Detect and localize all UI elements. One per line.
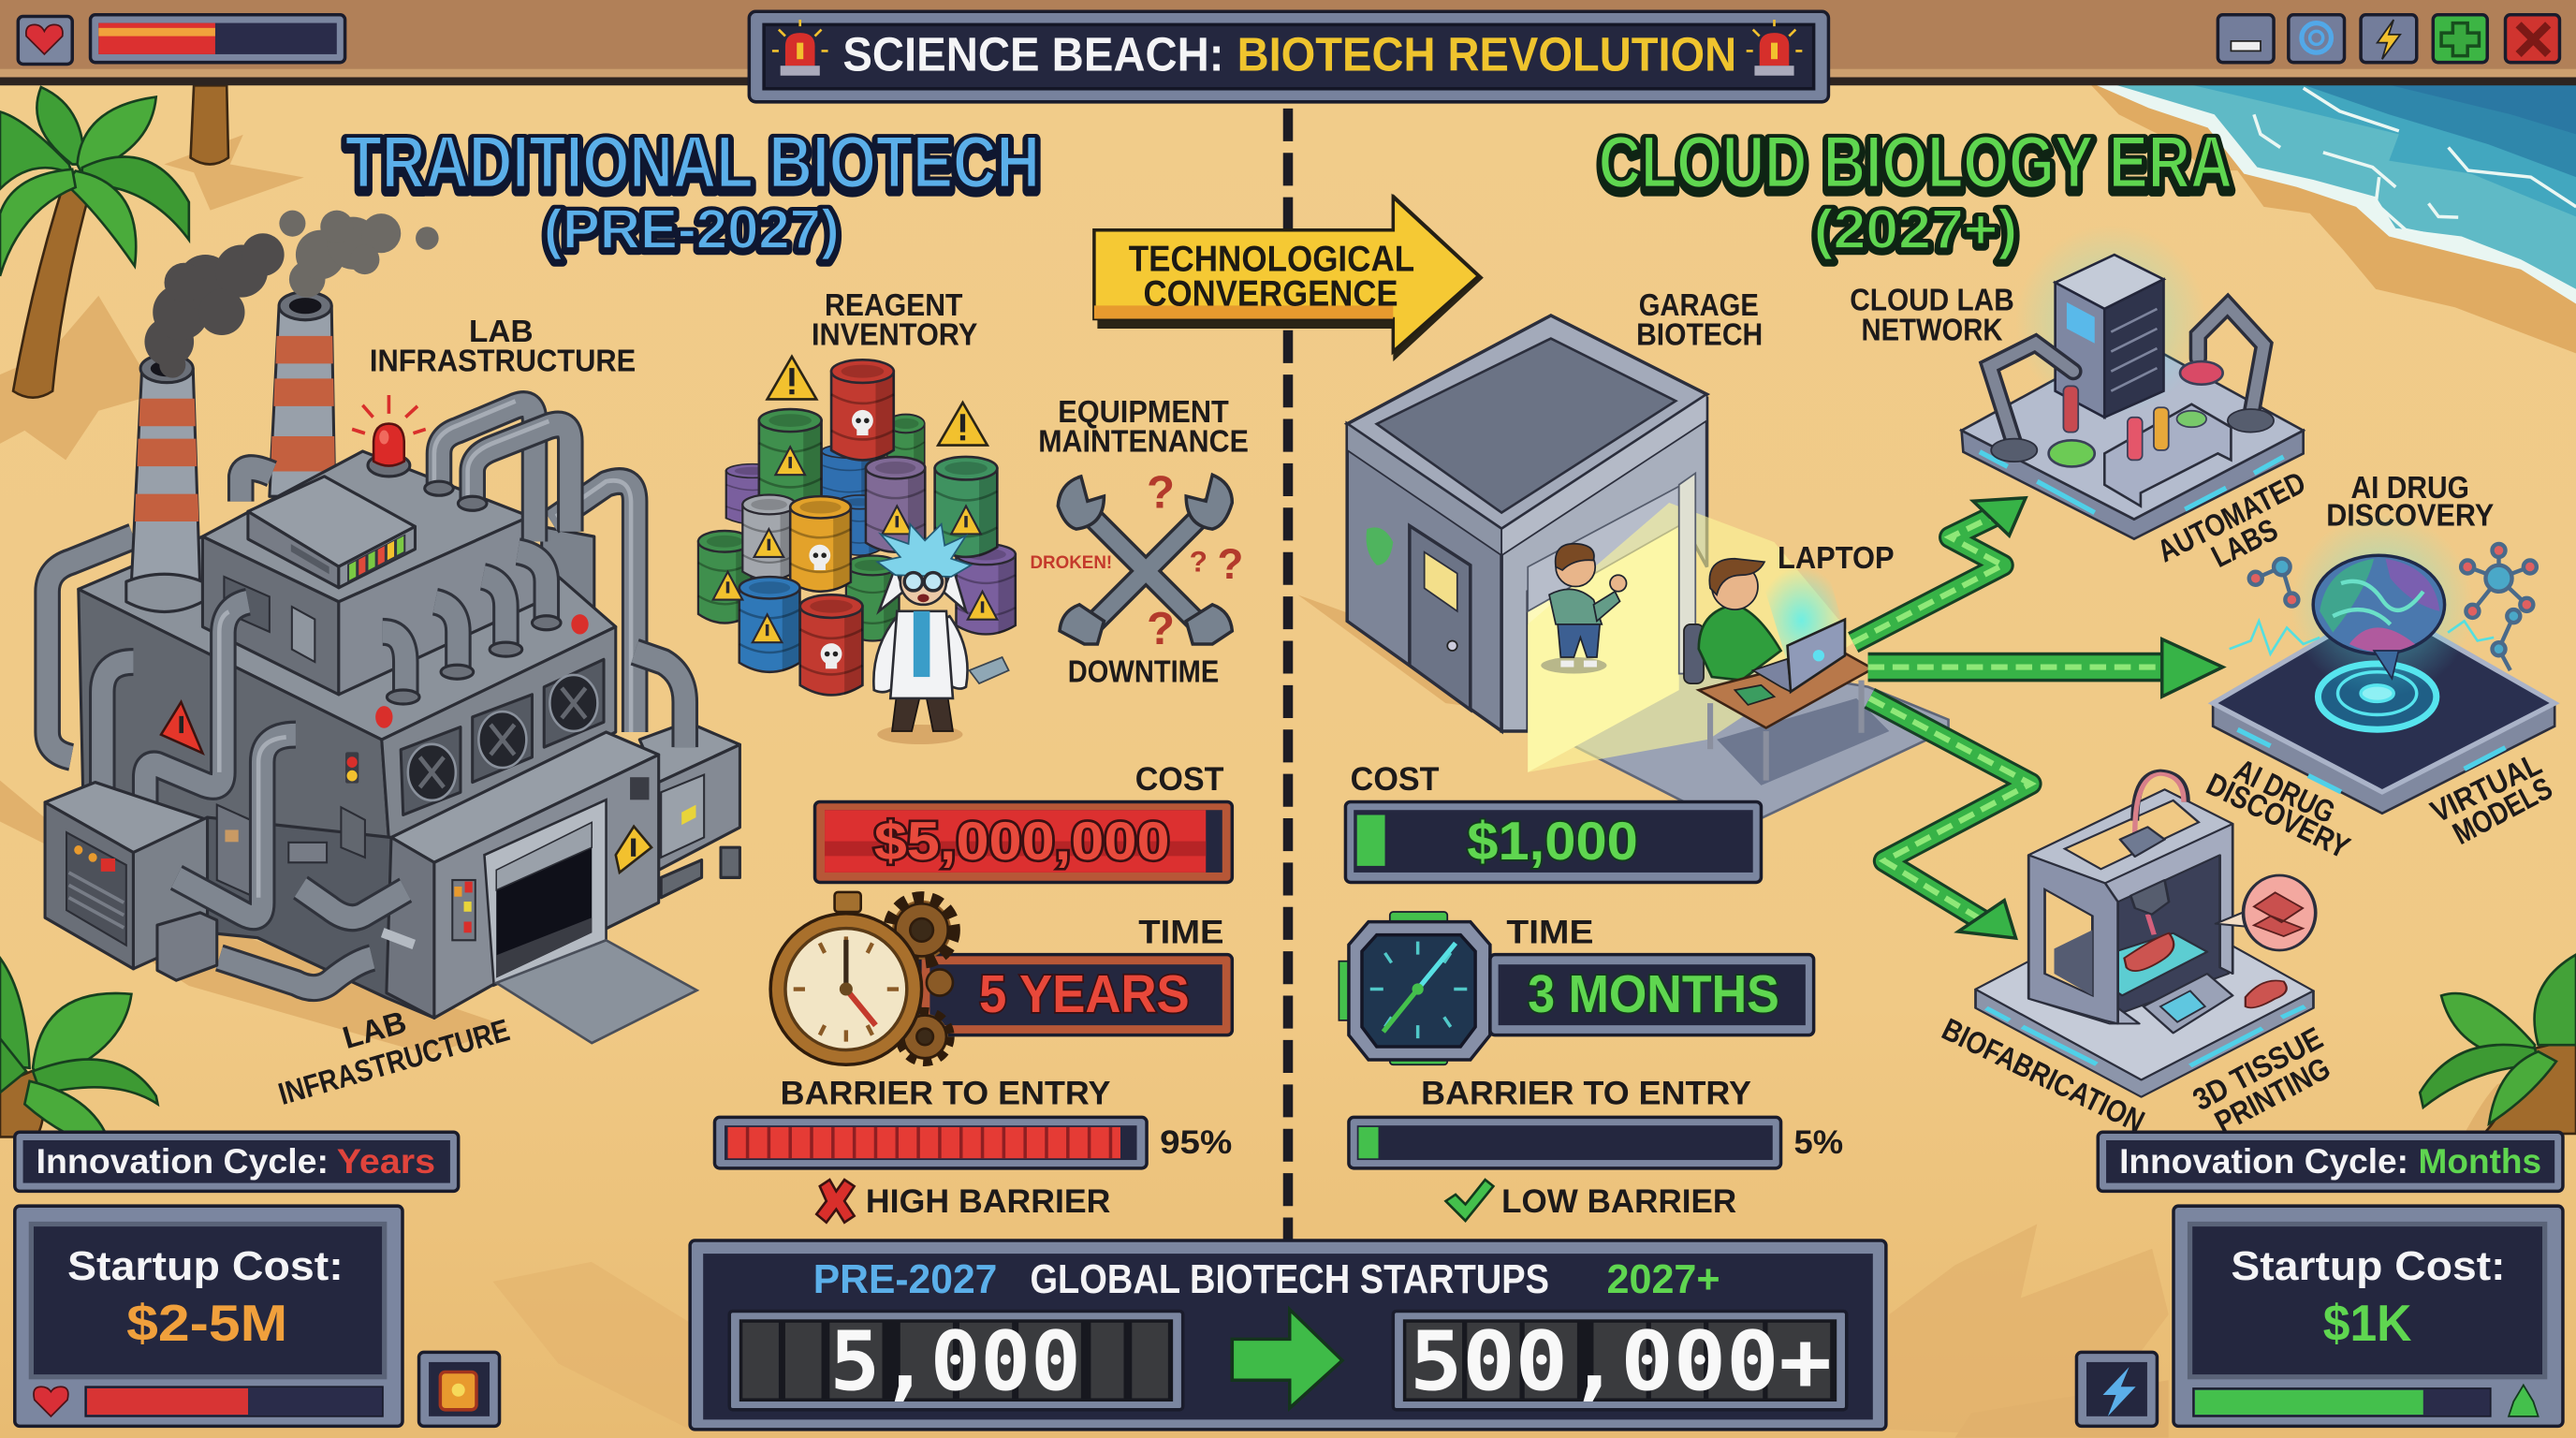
dishes and tubes [2049, 361, 2223, 466]
red alarm beacon [352, 395, 426, 477]
fans [401, 659, 604, 814]
heading: traditional biotech [345, 121, 1040, 262]
centre divider [1285, 109, 1291, 1240]
label: 3d tissue printing: 3D TISSUE [2188, 1021, 2329, 1118]
status: high barrier: HIGH BARRIER [866, 1183, 1110, 1220]
startup cost panel: traditional: Startup Cost: [67, 1243, 344, 1289]
chimney front [126, 355, 202, 611]
palm tree: top left [0, 87, 189, 460]
label: ai drug discovery [2326, 471, 2494, 534]
barrier bar: cloud [1349, 1117, 1781, 1168]
arrow: to automated labs [1853, 498, 2026, 642]
heading: cloud biology era: (2027+) [1814, 199, 2017, 262]
arrow label [1129, 240, 1414, 314]
lower pipes [157, 735, 416, 988]
time value: 5 YEARS [979, 964, 1190, 1023]
startup cost panel: cloud: Startup Cost: [2231, 1243, 2506, 1289]
loading ramp [496, 940, 697, 1043]
control box [248, 477, 415, 588]
warning lights [161, 614, 589, 784]
tissue callout [2216, 875, 2316, 950]
garage slab [1503, 649, 1949, 818]
icon: stopwatch with gears [770, 892, 953, 1064]
time value: 3 MONTHS [1528, 964, 1779, 1023]
arrow: to biofabrication [1869, 698, 2030, 938]
icon: broken wrenches [1030, 467, 1243, 654]
energy bar [2193, 1388, 2491, 1416]
label: time traditional: TIME [1138, 914, 1224, 950]
icon: broken wrenches: ? [1147, 604, 1175, 654]
label: cloud lab network [1850, 284, 2014, 347]
garage side door [1367, 526, 1471, 710]
label: equipment maintenance: MAINTENANCE [1038, 425, 1249, 460]
printer head and hose [2120, 772, 2186, 915]
arrow: technological convergence [1094, 194, 1484, 361]
global startups panel [690, 1240, 1886, 1430]
garage roof [1347, 315, 1707, 555]
barrier bar: traditional [714, 1117, 1147, 1168]
value: 5 percent: 5% [1794, 1124, 1843, 1161]
label: cost cloud: COST [1351, 761, 1440, 798]
label: barrier cloud: BARRIER TO ENTRY [1421, 1075, 1751, 1111]
heading: traditional biotech: (PRE-2027) [544, 198, 840, 260]
robot arm right [2198, 305, 2274, 433]
heading: cloud biology era: (2027+) [1814, 198, 2017, 260]
label: biofabrication: BIOFABRICATION [1937, 1012, 2149, 1140]
innovation cycle: months: Innovation Cycle: [2119, 1142, 2408, 1181]
innovation cycle: years [15, 1132, 459, 1191]
icon: warning triangle right [938, 403, 988, 446]
label: lab infrastructure: LAB [469, 315, 534, 349]
label: cloud lab network: CLOUD LAB [1850, 284, 2014, 318]
startup cost panel: cloud [2174, 1206, 2563, 1426]
label: barrier traditional: BARRIER TO ENTRY [781, 1075, 1110, 1111]
palm tree: bottom right [2420, 955, 2576, 1134]
counter: pre-2027 [729, 1312, 1183, 1410]
label: reagent inventory [812, 288, 977, 353]
label: ai drug discovery: AI DRUG [2351, 471, 2469, 506]
illustration: factory (lab infrastructure) [45, 292, 739, 1043]
counter: pre-2027: 5,000 [829, 1314, 1081, 1410]
glow: brain [2291, 513, 2474, 697]
arrow label: TECHNOLOGICAL [1129, 240, 1414, 280]
molecules [2249, 544, 2537, 670]
lab bench [2104, 404, 2231, 506]
title text: SCIENCE BEACH: [842, 27, 1224, 81]
icon box: lantern [419, 1352, 500, 1426]
button: minimise [2217, 15, 2274, 63]
icon: siren left [772, 20, 828, 76]
label: lab infrastructure: INFRASTRUCTURE [370, 345, 636, 379]
server rack [2056, 255, 2163, 418]
desk shadow [1717, 698, 1889, 785]
label: time cloud: TIME [1506, 914, 1593, 950]
robot arm left [1989, 344, 2073, 462]
innovation cycle: months [2098, 1132, 2563, 1191]
cost bar: cloud [1345, 801, 1761, 882]
label: lab infrastructure rotated [265, 978, 514, 1112]
value: 95 percent: 95% [1160, 1124, 1232, 1161]
label: cost traditional: COST [1135, 761, 1224, 798]
illustration: automated cloud lab [1962, 225, 2304, 539]
garage door opening and light [1528, 473, 1856, 772]
glow: server [2016, 225, 2206, 416]
annex block [635, 652, 739, 898]
label: 3d tissue printing: PRINTING [2210, 1051, 2336, 1140]
heading: traditional biotech: TRADITIONAL BIOTECH [345, 125, 1040, 207]
illustration: smoke [144, 211, 439, 378]
top bar [0, 0, 2576, 85]
tissue sample [2246, 980, 2287, 1007]
upper tier [202, 451, 539, 695]
label: ai drug discovery rotated: DISCOVERY [2201, 767, 2355, 866]
arrow: to ai drug discovery [1868, 639, 2223, 697]
time panel: cloud [1490, 955, 1814, 1035]
innovation cycle: months: Months [2419, 1142, 2541, 1181]
label: lab infrastructure [370, 315, 636, 379]
button: settings [2289, 15, 2345, 63]
neural signal [2230, 621, 2494, 654]
cost value: $5,000,000 [874, 812, 1170, 872]
icon: heart [18, 17, 72, 64]
label: automated labs: LABS [2206, 513, 2284, 575]
illustration: barrel stack [698, 360, 1016, 695]
time panel: traditional [920, 955, 1232, 1035]
button: close [2506, 15, 2559, 63]
heading: cloud biology era: CLOUD BIOLOGY ERA [1599, 125, 2232, 207]
icon: smart watch [1339, 912, 1490, 1064]
door block [387, 732, 659, 1018]
desk [1699, 653, 1873, 781]
illustration: ai drug discovery platform [2213, 513, 2554, 814]
icon: warning triangle left [768, 357, 816, 399]
title text highlighted: BIOTECH REVOLUTION [1237, 27, 1736, 81]
button: lightning [2361, 15, 2417, 63]
label: equipment maintenance: EQUIPMENT [1058, 395, 1229, 430]
panel header [813, 1256, 1720, 1302]
label: reagent inventory: INVENTORY [812, 318, 977, 353]
printer frame [2028, 789, 2232, 1023]
status: low barrier: LOW BARRIER [1501, 1183, 1736, 1220]
label: automated labs: AUTOMATED [2152, 465, 2311, 569]
label: broken: DROKEN! [1030, 553, 1112, 573]
window buttons [2217, 15, 2559, 63]
hologram rings [2318, 664, 2437, 729]
person waving [1541, 544, 1627, 674]
heading: traditional biotech: (PRE-2027) [544, 199, 840, 262]
printer console [2144, 974, 2232, 1033]
startup cost panel: traditional: $2-5M [126, 1295, 287, 1352]
sand dunes [0, 594, 2169, 1438]
illustration: stressed scientist [873, 524, 1009, 744]
label: garage biotech [1636, 288, 1763, 353]
label: garage biotech: BIOTECH [1636, 318, 1763, 353]
label: ai drug discovery rotated: AI DRUG [2229, 753, 2340, 830]
brain [2313, 555, 2445, 679]
health bar small [85, 1387, 383, 1416]
label: automated labs [2152, 465, 2311, 575]
rear pipes [48, 468, 635, 757]
icon: broken wrenches: ? [1147, 467, 1175, 518]
ai platform [2213, 605, 2554, 814]
arrow: growth [1232, 1310, 1342, 1408]
person at laptop [1684, 559, 1781, 683]
icon: broken wrenches: ? [1190, 545, 1208, 579]
health bar [91, 15, 345, 63]
heading: cloud biology era [1599, 121, 2232, 262]
panel header: 2027+ [1606, 1256, 1720, 1302]
lab platform [1962, 337, 2304, 539]
panel header: GLOBAL BIOTECH STARTUPS [1030, 1256, 1549, 1302]
label: ai drug discovery rotated [2201, 753, 2355, 866]
lower section [208, 805, 434, 1018]
printer platform [1976, 899, 2313, 1097]
label: reagent inventory: REAGENT [825, 288, 962, 323]
ocean [2091, 85, 2576, 354]
icon: heart small [34, 1387, 68, 1416]
arrow label: CONVERGENCE [1144, 273, 1398, 314]
label: downtime: DOWNTIME [1068, 654, 1219, 689]
panel header: PRE-2027 [813, 1256, 997, 1302]
icon: alien [2509, 1385, 2539, 1416]
chimney back [270, 292, 335, 496]
upper pipes [383, 401, 570, 704]
startup cost panel: cloud: $1K [2323, 1295, 2411, 1352]
glow: laptop [1758, 566, 1845, 674]
icon: siren right [1747, 20, 1802, 76]
laptop [1753, 620, 1845, 692]
middle tier [79, 536, 616, 840]
left block with shutter [45, 783, 208, 969]
title banner [749, 11, 1828, 102]
cost bar: traditional [815, 801, 1232, 882]
left wall pipes [102, 602, 248, 814]
cost value: $1,000 [1467, 812, 1638, 872]
label: ai drug discovery: DISCOVERY [2326, 499, 2494, 534]
button: add [2433, 15, 2487, 63]
palm tree: background trunk [165, 85, 304, 211]
innovation cycle: years: Innovation Cycle: [37, 1142, 329, 1181]
innovation cycle: years: Years [337, 1142, 435, 1181]
illustration: 3d tissue printer [1976, 772, 2316, 1097]
label: lab infrastructure rotated: LAB [339, 1005, 410, 1056]
heading: traditional biotech: TRADITIONAL BIOTECH [345, 121, 1040, 203]
icon box: lightning [2076, 1352, 2157, 1426]
icon: broken wrenches: ? [1218, 540, 1243, 588]
label: lab infrastructure rotated: INFRASTRUCTURE [275, 1013, 514, 1112]
palm tree: bottom left [0, 958, 157, 1151]
label: virtual models: VIRTUAL [2425, 747, 2547, 830]
label: garage biotech: GARAGE [1639, 288, 1759, 323]
garage walls [1347, 399, 1707, 731]
label: equipment maintenance [1038, 395, 1249, 460]
counter: 2027+: 500,000+ [1410, 1314, 1832, 1410]
heading: cloud biology era: CLOUD BIOLOGY ERA [1599, 121, 2232, 203]
label: laptop: LAPTOP [1778, 541, 1895, 576]
illustration: garage [1347, 315, 1949, 818]
startup cost panel: traditional [15, 1206, 402, 1426]
label: cloud lab network: NETWORK [1862, 313, 2002, 347]
